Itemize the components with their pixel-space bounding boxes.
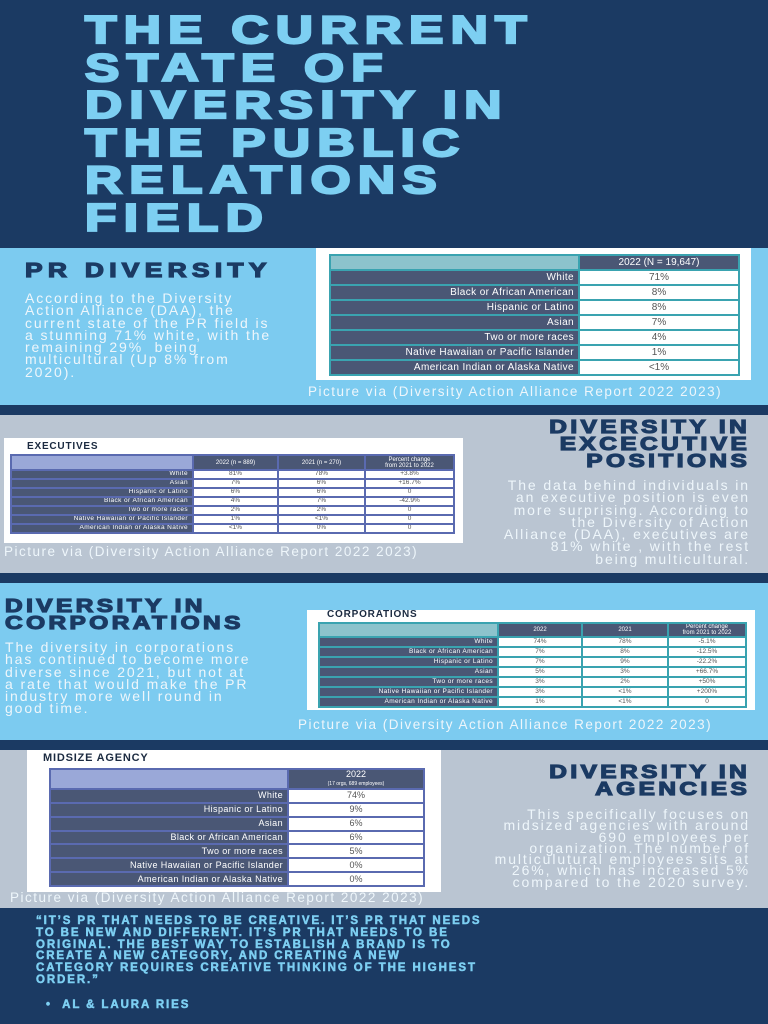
text: agencies: midsized agencies with around — [503, 817, 750, 833]
text: PR diversity: Action Alliance (DAA), the — [25, 302, 235, 318]
caption: PR diversity: Picture via (Diversity Action Alliance Report 2022 2023) — [308, 384, 722, 399]
heading: executives: DIVERSITY IN — [549, 416, 750, 437]
caption: agencies: Picture via (Diversity Action Alliance Report 2022 2023) — [10, 890, 424, 905]
table: midsize agency: Hispanic or Latino — [204, 804, 283, 814]
text: agencies: multiculutural employees sits at — [495, 851, 750, 867]
text: executives — [504, 477, 750, 567]
panel: corporations — [0, 583, 768, 740]
text: executives: The data behind individuals in — [508, 477, 750, 493]
quote author: • AL & LAURA RIES — [46, 999, 190, 1011]
title: RELATIONS — [85, 159, 444, 202]
table: midsize agency — [27, 750, 441, 892]
table: PR diversity: 8% — [652, 302, 666, 312]
caption: executives: Picture via (Diversity Action Alliance Report 2022 2023) — [4, 544, 418, 559]
table: executives: 2022 (n = 889) — [216, 460, 255, 466]
table: midsize agency: American Indian or Alaska Native — [138, 874, 283, 884]
table: PR diversity: Hispanic or Latino — [487, 302, 574, 312]
heading: agencies — [549, 761, 750, 799]
text: executives: Alliance (DAA), executives are — [504, 526, 750, 542]
table: corporations: 2022 — [533, 627, 547, 633]
heading: executives: POSITIONS — [586, 450, 750, 471]
table: midsize agency: Native Hawaiian or Pacific Islander — [130, 860, 283, 870]
text: agencies: 690 employees per — [599, 829, 750, 845]
quote — [36, 915, 482, 1011]
quote: ORDER.” — [36, 974, 100, 986]
table: PR diversity: Two or more races — [484, 332, 574, 342]
text: corporations: a rate that would make the PR — [5, 676, 248, 692]
table: executives — [4, 438, 463, 543]
heading: PR diversity: PR DIVERSITY — [25, 260, 272, 282]
table: executives: Percent change — [388, 456, 431, 462]
text: corporations: diverse since 2021, but not at — [5, 664, 245, 680]
text: executives: 81% white , with the rest — [551, 538, 750, 554]
text: corporations: has continued to become more — [5, 651, 250, 667]
label: corporations: CORPORATIONS — [327, 609, 418, 620]
text: corporations: industry more well round in — [5, 688, 224, 704]
table: midsize agency: Two or more races — [202, 846, 283, 856]
title: FIELD — [85, 196, 270, 240]
title — [84, 9, 534, 240]
table: corporations: 2021 — [618, 627, 632, 633]
panel: agencies — [0, 750, 768, 908]
table: PR diversity: White — [546, 272, 574, 282]
heading: corporations: CORPORATIONS — [5, 612, 244, 633]
table: midsize agency: Asian — [258, 818, 283, 828]
text: agencies — [495, 806, 750, 890]
table: PR diversity — [316, 248, 751, 380]
table: executives: 2021 (n = 270) — [302, 460, 341, 466]
text: PR diversity: According to the Diversity — [25, 290, 233, 306]
table: midsize agency: 0% — [349, 860, 362, 870]
heading: executives — [549, 416, 750, 471]
label: executives: EXECUTIVES — [27, 441, 98, 452]
heading: executives: EXCECUTIVE — [560, 433, 750, 454]
text: corporations: The diversity in corporations — [5, 639, 235, 655]
panel: PR diversity — [0, 248, 768, 405]
table: PR diversity: Black or African American — [450, 286, 574, 298]
table: PR diversity: 7% — [652, 316, 666, 328]
table: midsize agency: 6% — [349, 832, 362, 842]
panel: executives — [0, 415, 768, 573]
quote: CATEGORY REQUIRES CREATIVE THINKING OF THE HIGHEST — [36, 962, 477, 974]
heading: corporations: DIVERSITY IN — [5, 595, 206, 616]
table: midsize agency: 6% — [349, 818, 362, 828]
table: PR diversity: <1% — [649, 362, 669, 372]
table: PR diversity: 4% — [652, 332, 666, 342]
text: PR diversity: 2020). — [25, 364, 76, 380]
table: PR diversity: Asian — [547, 316, 574, 328]
quote: ORIGINAL. THE BEST WAY TO ESTABLISH A BRAND IS TO — [36, 939, 452, 951]
table: PR diversity: Native Hawaiian or Pacific Islander — [405, 346, 574, 358]
table: PR diversity: American Indian or Alaska Native — [414, 362, 574, 372]
table: PR diversity: 8% — [652, 286, 666, 298]
quote: TO BE NEW AND DIFFERENT. IT’S PR THAT NEEDS TO BE — [36, 927, 449, 939]
table: midsize agency: 74% — [347, 790, 365, 800]
text: agencies: This specifically focuses on — [527, 806, 750, 822]
text: PR diversity — [25, 290, 271, 380]
text: executives: being multicultural. — [595, 551, 750, 567]
table: corporations: from 2021 to 2022 — [683, 630, 731, 636]
table: midsize agency: Black or African American — [170, 832, 283, 842]
heading: corporations — [5, 595, 244, 633]
table: corporations: Percent change — [686, 624, 728, 630]
table: midsize agency: 0% — [349, 874, 362, 884]
table: midsize agency: 5% — [349, 846, 362, 856]
title: THE CURRENT — [85, 9, 534, 52]
text: executives: the Diversity of Action — [572, 514, 750, 530]
caption: corporations: Picture via (Diversity Action Alliance Report 2022 2023) — [298, 717, 712, 732]
text: corporations: good time. — [5, 700, 89, 716]
quote: CREATE A NEW CATEGORY, AND CREATING A NEW — [36, 950, 401, 962]
text: executives: an executive position is even — [516, 489, 750, 505]
text: PR diversity: current state of the PR field is — [25, 315, 269, 331]
table: PR diversity: 2022 (N = 19,647) — [619, 257, 699, 268]
table: PR diversity: 71% — [649, 272, 669, 282]
title: DIVERSITY IN — [85, 84, 509, 127]
table: midsize agency: 9% — [349, 804, 362, 814]
table: midsize agency: (17 orgs, 689 employees) — [328, 781, 384, 787]
text: agencies: 26%, which has increased 5% — [512, 862, 750, 878]
text: agencies: compared to the 2020 survey. — [513, 874, 750, 890]
text: corporations — [5, 639, 250, 716]
table: midsize agency: White — [258, 790, 283, 800]
text: PR diversity: multicultural (Up 8% from — [25, 351, 230, 367]
heading: agencies: DIVERSITY IN — [549, 761, 750, 782]
table: executives: from 2021 to 2022 — [385, 462, 434, 468]
text: PR diversity: a stunning 71% white, with the — [25, 327, 271, 343]
table: PR diversity: 1% — [652, 346, 666, 358]
table: corporations — [307, 610, 755, 710]
text: PR diversity: remaining 29% being — [25, 339, 198, 355]
label: midsize agency: MIDSIZE AGENCY — [43, 752, 149, 764]
heading: agencies: AGENCIES — [595, 778, 750, 799]
quote: “IT’S PR THAT NEEDS TO BE CREATIVE. IT’S PR THAT NEEDS — [36, 915, 482, 927]
title: STATE OF — [85, 46, 390, 90]
text: agencies: organization.The number of — [529, 840, 750, 856]
title: THE PUBLIC — [85, 122, 466, 164]
text: executives: more surprising. According to — [514, 502, 750, 518]
